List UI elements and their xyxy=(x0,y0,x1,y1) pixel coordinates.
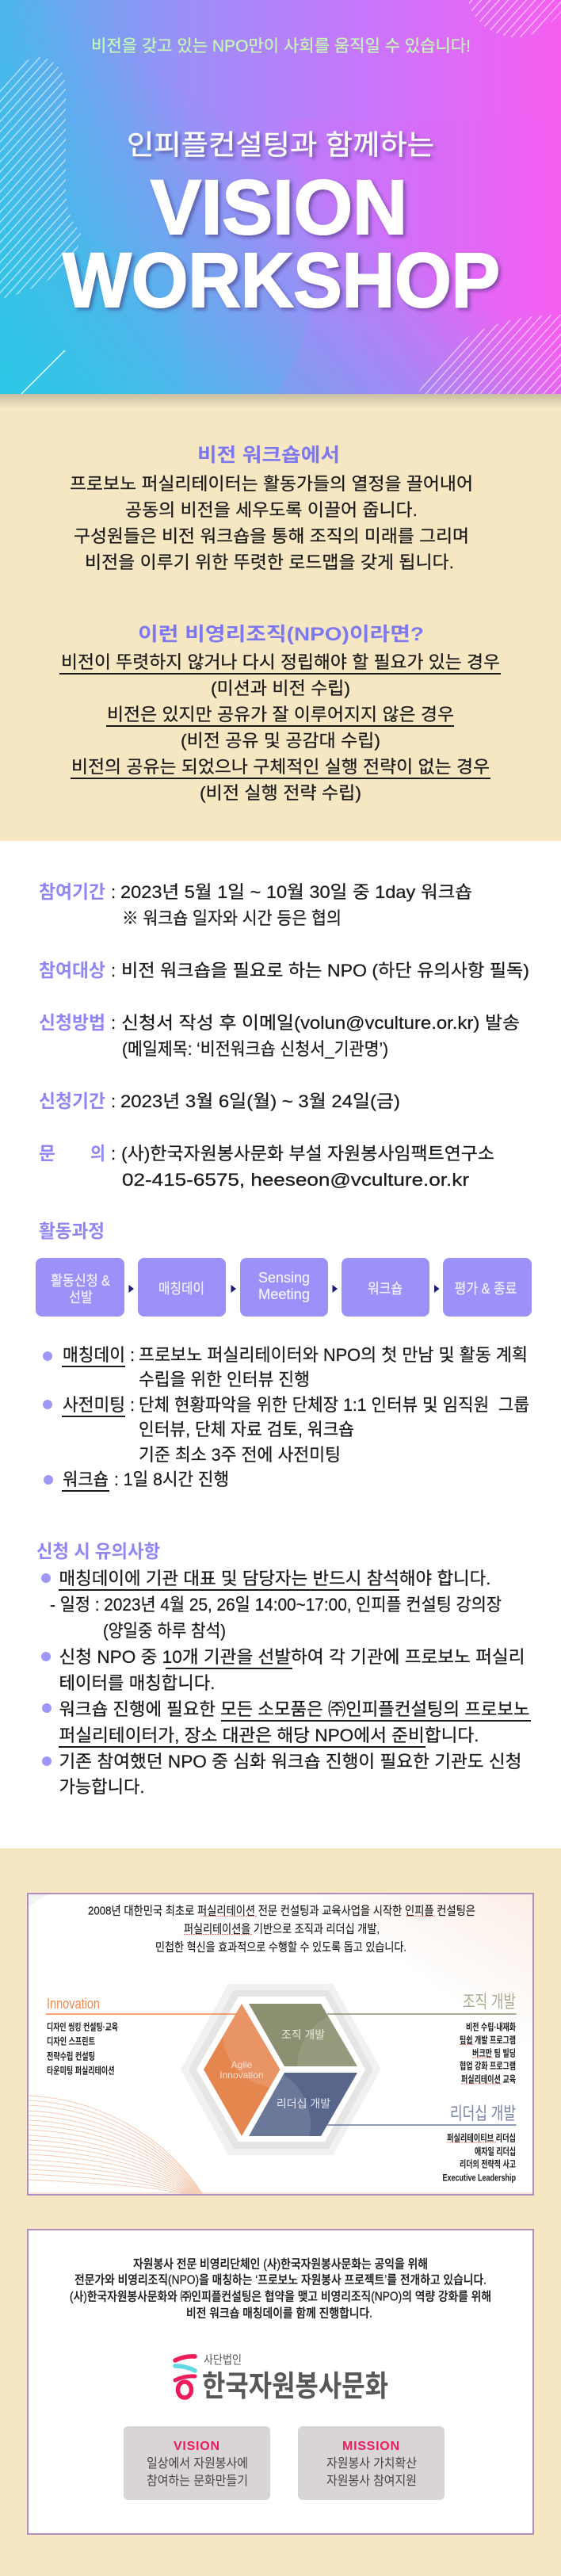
note 2: 테이터를 매칭합니다. xyxy=(59,1673,216,1693)
row: contact: 문 xyxy=(39,1143,55,1164)
row: contact: : xyxy=(111,1144,116,1164)
row: contact: 02-415-6575, heeseon@vculture.or.kr xyxy=(122,1170,469,1190)
segment: agile innovation: Innovation xyxy=(219,2070,264,2081)
vision card: VISION xyxy=(174,2440,219,2453)
row: application period xyxy=(39,1091,400,1111)
panel intro text: (사)한국자원봉사문화와 ㈜인피플컨설팅은 협약을 맺고 비영리조직(NPO)의 역량 강화를 위해 xyxy=(70,2289,491,2303)
section: application notes xyxy=(36,1541,531,1797)
innovation column: Innovation xyxy=(47,1996,100,2012)
panel intro text: 퍼실리테이션을 기반으로 조직과 리더십 개발, xyxy=(184,1923,380,1936)
leadership development column xyxy=(327,2104,517,2183)
step 4 box: 워크숍 xyxy=(368,1281,403,1297)
row: how to apply xyxy=(39,1012,520,1059)
vision card xyxy=(124,2426,270,2500)
step 3 box xyxy=(240,1258,328,1317)
logo icon xyxy=(175,2356,195,2398)
row: how to apply: 신청방법 xyxy=(39,1012,105,1033)
process detail: workshop xyxy=(44,1470,229,1491)
segment: agile innovation: Agile xyxy=(231,2059,253,2070)
row: participation period: 참여기간 xyxy=(39,881,105,902)
arrow 2 xyxy=(231,1285,236,1293)
section: application details xyxy=(39,881,529,1190)
note 1: - 일정 : 2023년 4월 25, 26일 14:00~17:00, 인피플 컨설팅 강의장 xyxy=(50,1595,502,1615)
arrow 1 xyxy=(128,1285,134,1293)
leadership development column: Executive Leadership xyxy=(442,2172,516,2183)
intro text: 비전을 이루기 위한 뚜렷한 로드맵을 갖게 됩니다. xyxy=(85,552,454,572)
hero banner xyxy=(0,0,561,394)
NPO conditions list: (미션과 비전 수립) xyxy=(211,678,350,698)
panel intro text: 민첩한 혁신을 효과적으로 수행할 수 있도록 돕고 있습니다. xyxy=(155,1940,406,1955)
leadership development column: 퍼실리테이티브 리더십 xyxy=(447,2132,516,2143)
process detail: pre-meeting: : xyxy=(130,1395,135,1415)
row: application period: 신청기간 xyxy=(39,1091,105,1111)
note 4 xyxy=(42,1752,521,1797)
organization development column: 버크만 팀 빌딩 xyxy=(472,2048,516,2059)
hero title: VISION: VISION xyxy=(151,164,407,250)
logo: 사단법인 xyxy=(204,2353,242,2367)
note 4: 가능합니다. xyxy=(59,1777,144,1797)
organization development column xyxy=(327,1992,517,2085)
row: application period: 2023년 3월 6일(월) ~ 3월 24일(금) xyxy=(120,1091,400,1111)
panel intro text: 자원봉사 전문 비영리단체인 (사)한국자원봉사문화는 공익을 위해 xyxy=(133,2257,428,2272)
step 5 box xyxy=(443,1258,532,1317)
process detail: matching day: 프로보노 퍼실리테이터와 NPO의 첫 만남 및 활동 계획 xyxy=(139,1345,528,1365)
process detail: workshop: : 1일 8시간 진행 xyxy=(114,1470,229,1489)
mission card: MISSION xyxy=(342,2440,399,2453)
section: activity process xyxy=(36,1221,532,1491)
note 2: 신청 NPO 중 10개 기관을 선발하여 각 기관에 프로보노 퍼실리 xyxy=(59,1647,525,1667)
row: target: 비전 워크숍을 필요로 하는 NPO (하단 유의사항 필독) xyxy=(121,961,529,980)
note 1: (양일중 하루 참석) xyxy=(103,1621,226,1641)
panel intro text: 비전 워크숍 매칭데이를 함께 진행합니다. xyxy=(186,2307,372,2321)
decorative white line xyxy=(21,350,65,394)
logo: 한국자원봉사문화 xyxy=(202,2370,388,2402)
step 2 box xyxy=(138,1258,226,1317)
leadership development column: 리더십 개발 xyxy=(450,2104,516,2123)
logo xyxy=(175,2353,388,2402)
segment: agile innovation xyxy=(204,2004,280,2136)
NPO conditions list: (비전 실행 전략 수립) xyxy=(200,783,361,803)
row: participation period xyxy=(39,881,472,928)
hero tagline: 비전을 갖고 있는 NPO만이 사회를 움직일 수 있습니다! xyxy=(91,37,471,55)
row: how to apply: 신청서 작성 후 이메일(volun@vculture.or.kr) 발송 xyxy=(121,1013,520,1033)
row: how to apply: : xyxy=(111,1013,116,1033)
process detail: pre-meeting: 사전미팅 xyxy=(63,1395,125,1415)
note 1: 매칭데이에 기관 대표 및 담당자는 반드시 참석해야 합니다. xyxy=(59,1569,491,1588)
NPO conditions list: (비전 공유 및 공감대 수립) xyxy=(181,731,380,751)
process detail: matching day xyxy=(43,1345,528,1389)
hero title: WORKSHOP: WORKSHOP xyxy=(63,237,500,323)
intro text xyxy=(70,474,473,572)
vision card: 일상에서 자원봉사에 xyxy=(147,2456,248,2471)
step 2 box: 매칭데이 xyxy=(158,1281,204,1297)
mission card: 자원봉사 가치확산 xyxy=(326,2456,417,2471)
row: contact: 의 xyxy=(90,1143,105,1164)
note 3: 워크숍 진행에 필요한 모든 소모품은 ㈜인피플컨설팅의 프로보노 xyxy=(59,1699,529,1719)
row: target: : xyxy=(111,961,116,980)
hero subtitle: 인피플컨설팅과 함께하는 xyxy=(127,130,434,161)
arrow 3 xyxy=(333,1285,338,1293)
step 3 box: Meeting xyxy=(258,1286,310,1302)
innovation column xyxy=(46,1996,237,2077)
note 4: 기존 참여했던 NPO 중 심화 워크숍 진행이 필요한 기관도 신청 xyxy=(59,1752,521,1771)
intro text: 공동의 비전을 세우도록 이끌어 줍니다. xyxy=(125,500,418,520)
row: participation period: 2023년 5월 1일 ~ 10월 30일 중 1day 워크숍 xyxy=(120,882,472,902)
row: contact: (사)한국자원봉사문화 부설 자원봉사임팩트연구소 xyxy=(121,1144,494,1164)
step 1 box: 활동신청 & xyxy=(51,1273,110,1289)
stripes: bottom right circle xyxy=(418,315,561,394)
row: how to apply: (메일제목: ‘비전워크숍 신청서_기관명’) xyxy=(122,1039,388,1059)
vision card: 참여하는 문화만들기 xyxy=(147,2474,248,2488)
process detail: workshop: 워크숍 xyxy=(63,1470,109,1489)
innovation column: 디자인 스프린트 xyxy=(47,2035,95,2047)
panel intro text: 전문가와 비영리조직(NPO)을 매칭하는 ‘프로보노 자원봉사 프로젝트’를 전개하고 있습니다. xyxy=(74,2273,487,2287)
panel intro text xyxy=(88,1904,475,1955)
step 1 box: 선발 xyxy=(69,1290,93,1305)
row: contact xyxy=(39,1143,494,1190)
panel: inpeople consulting xyxy=(28,1894,533,2196)
segment: leadership development xyxy=(249,2073,357,2136)
NPO conditions list: 비전이 뚜렷하지 않거나 다시 정립해야 할 필요가 있는 경우 xyxy=(61,652,500,672)
heading: notes: 신청 시 유의사항 xyxy=(36,1541,160,1561)
mission card: 자원봉사 참여지원 xyxy=(326,2474,417,2488)
intro text: 구성원들은 비전 워크숍을 통해 조직의 미래를 그리며 xyxy=(74,526,469,546)
process detail: matching day: 매칭데이 xyxy=(63,1345,125,1365)
innovation column: 디자인 씽킹 컨설팅·교육 xyxy=(47,2021,118,2032)
panel intro text xyxy=(70,2257,491,2321)
leadership development column: 애자일 리더십 xyxy=(475,2146,516,2157)
organization development column: 협업 강화 프로그램 xyxy=(460,2059,516,2072)
process detail: pre-meeting: 인터뷰, 단체 자료 검토, 워크숍 xyxy=(139,1420,354,1439)
note 3: 퍼실리테이터가, 장소 대관은 해당 NPO에서 준비합니다. xyxy=(59,1726,479,1745)
process detail: pre-meeting xyxy=(43,1395,529,1465)
row: application period: : xyxy=(111,1091,116,1111)
step 4 box xyxy=(342,1258,429,1317)
segment: organization development: 조직 개발 xyxy=(281,2028,325,2041)
panel: korea volunteer culture xyxy=(28,2230,533,2534)
row: target: 참여대상 xyxy=(39,960,105,980)
note 3 xyxy=(42,1699,531,1747)
arrow 4 xyxy=(434,1285,439,1293)
intro text: 프로보노 퍼실리테이터는 활동가들의 열정을 끌어내어 xyxy=(70,474,473,494)
organization development column: 비전 수립·내재화 xyxy=(466,2021,516,2032)
hexagon diagram xyxy=(181,1984,381,2155)
step 5 box: 평가 & 종료 xyxy=(455,1281,517,1297)
organization development column: 팀쉽 개발 프로그램 xyxy=(460,2035,516,2046)
innovation column: 전략수립 컨설팅 xyxy=(47,2051,95,2062)
mission card xyxy=(298,2426,445,2500)
organization development column: 퍼실리테이션 교육 xyxy=(461,2073,516,2085)
row: participation period: : xyxy=(111,882,116,902)
stripes: left rounded shape xyxy=(0,57,81,299)
row: participation period: ※ 워크숍 일자와 시간 등은 협의 xyxy=(122,908,342,928)
heading: NPO: 이런 비영리조직(NPO)이라면? xyxy=(138,624,424,645)
note 1 xyxy=(41,1569,502,1641)
NPO conditions list: 비전의 공유는 되었으나 구체적인 실행 전략이 없는 경우 xyxy=(71,757,490,777)
NPO conditions list xyxy=(59,652,501,803)
heading: process: 활동과정 xyxy=(39,1221,105,1241)
step 3 box: Sensing xyxy=(258,1270,310,1286)
organization development column: 조직 개발 xyxy=(463,1992,516,2012)
stripes: top right circle xyxy=(468,0,561,37)
note 2 xyxy=(41,1647,525,1693)
heading: vision workshop: 비전 워크숍에서 xyxy=(197,445,340,466)
arc line pattern xyxy=(29,2096,204,2196)
process detail: matching day: 수립을 위한 인터뷰 진행 xyxy=(139,1370,310,1389)
step 1 box xyxy=(36,1258,124,1317)
process detail: pre-meeting: 단체 현황파악을 위한 단체장 1:1 인터뷰 및 임직원 그룹 xyxy=(139,1395,529,1415)
process detail: pre-meeting: 기준 최소 3주 전에 사전미팅 xyxy=(139,1445,341,1465)
leadership development column: 리더의 전략적 사고 xyxy=(460,2159,516,2170)
section: about the vision workshop xyxy=(59,445,501,803)
NPO conditions list: 비전은 있지만 공유가 잘 이루어지지 않은 경우 xyxy=(107,705,454,724)
segment: leadership development: 리더십 개발 xyxy=(277,2097,330,2110)
panel intro text: 2008년 대한민국 최초로 퍼실리테이션 전문 컨설팅과 교육사업을 시작한 인피플 컨설팅은 xyxy=(88,1904,475,1918)
segment: organization development xyxy=(249,2004,357,2066)
process detail: matching day: : xyxy=(130,1345,135,1365)
innovation column: 타운미팅 퍼실리테이션 xyxy=(47,2066,114,2077)
